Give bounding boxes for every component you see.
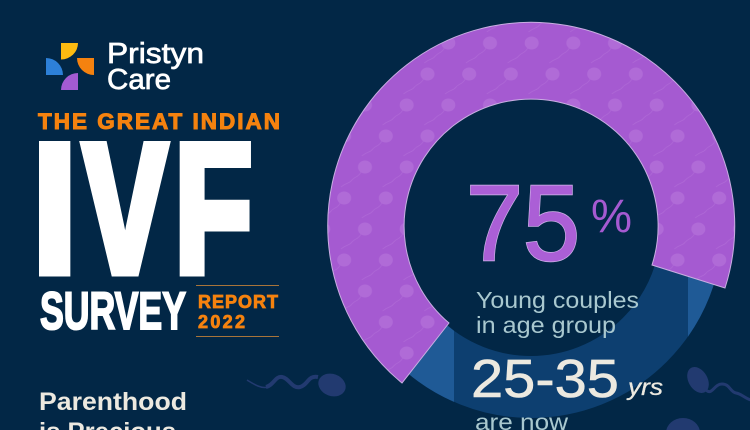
donut remainder: blue segment [410, 266, 714, 418]
logo: Pristyn Care [46, 38, 204, 96]
decorative sperm: left [247, 370, 349, 400]
icon: four-petal cross mark [46, 43, 94, 90]
report 2022 tag [196, 285, 279, 337]
tagline: Parenthood is Precious [39, 388, 187, 430]
logo wordmark [107, 38, 204, 96]
tagline: Parenthood is Precious: Parenthood [39, 388, 187, 416]
heading: Survey: SURVEY [40, 282, 186, 341]
stat: 75%: 75 [466, 162, 580, 283]
logo wordmark: Care [107, 64, 171, 96]
stat: 75%: 75 [466, 162, 580, 283]
heading: IVF: V [82, 99, 168, 318]
decorative sperm head: bottom right [666, 418, 700, 430]
heading: IVF [39, 141, 251, 276]
logo wordmark: Pristyn [107, 38, 204, 70]
report 2022 tag: REPORT [198, 292, 278, 312]
donut chart: 75 percent [328, 22, 735, 387]
heading: IVF: I [27, 99, 81, 318]
heading: The Great Indian: THE GREAT INDIAN [38, 109, 280, 134]
donut value: purple segment [328, 22, 735, 383]
age range: 25-35 yrs: yrs [626, 374, 664, 400]
decorative sperm: right [683, 363, 750, 400]
stat description: in age group [476, 312, 616, 338]
age range: 25-35 yrs: 25-35 [471, 349, 619, 409]
stat: 75%: % [591, 189, 632, 242]
stat description: Young couples [476, 287, 639, 313]
report 2022 tag: 2022 [198, 312, 245, 332]
stat description [476, 287, 639, 338]
heading: IVF: F [174, 99, 252, 318]
